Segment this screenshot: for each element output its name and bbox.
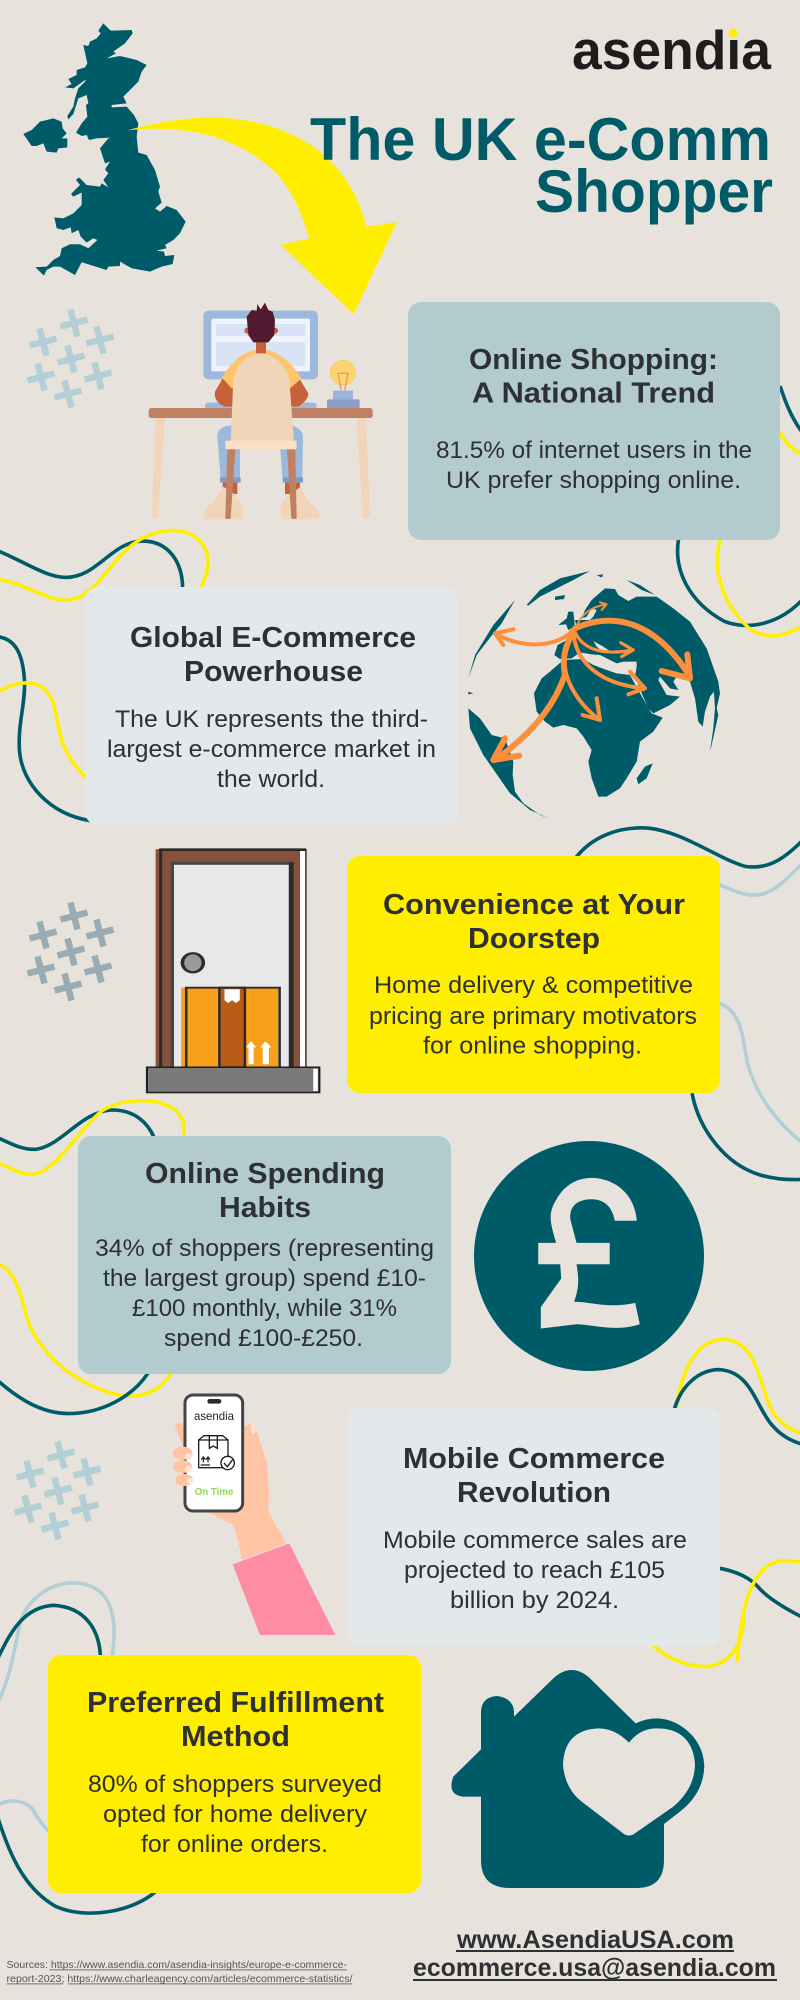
- panel: fulfillment: [48, 1655, 421, 1893]
- icon: house with heart: [451, 1670, 704, 1888]
- panel: global e-commerce: The UK represents the third-: [115, 706, 428, 733]
- decorative plus cluster three: [14, 1442, 100, 1540]
- title: The UK e-Comm: [310, 106, 771, 173]
- panel: convenience: pricing are primary motivators: [369, 1003, 697, 1030]
- panel: convenience: [347, 856, 720, 1093]
- panel: fulfillment: opted for home delivery: [103, 1801, 368, 1828]
- panel: fulfillment: Preferred Fulfillment: [87, 1687, 384, 1719]
- footer contact links: [413, 1926, 777, 1982]
- title: [310, 106, 773, 225]
- footer contact links: ecommerce.usa@asendia.com: [413, 1954, 776, 1982]
- decorative squiggles right of panel one: [781, 387, 800, 455]
- panel: spending habits: spend £100-£250.: [164, 1325, 363, 1352]
- panel: online shopping: 81.5% of internet users in the: [436, 437, 752, 464]
- panel: mobile commerce: Revolution: [457, 1477, 611, 1509]
- decorative squiggles upper: [0, 531, 800, 1144]
- panel: fulfillment: 80% of shoppers surveyed: [88, 1771, 382, 1798]
- panel: spending habits: Online Spending: [145, 1158, 385, 1190]
- panel: mobile commerce: billion by 2024.: [450, 1587, 619, 1614]
- sources: Sources: https://www.asendia.com/asendia-insights/europe-e-commerce-: [6, 1959, 347, 1971]
- panel: spending habits: £100 monthly, while 31%: [132, 1295, 397, 1322]
- panel: online shopping: UK prefer shopping online.: [446, 467, 741, 494]
- panel: online shopping: A National Trend: [472, 378, 715, 410]
- panel: spending habits: [78, 1136, 451, 1374]
- panel: fulfillment: for online orders.: [141, 1831, 328, 1858]
- decorative plus cluster two: [28, 902, 114, 1000]
- icon: UK map: [23, 23, 186, 276]
- panel: mobile commerce: Mobile commerce sales are: [383, 1527, 687, 1554]
- panel: convenience: Doorstep: [468, 923, 600, 955]
- panel: global e-commerce: Global E-Commerce: [130, 622, 416, 654]
- panel: online shopping: [408, 302, 780, 540]
- panel: global e-commerce: [85, 587, 458, 825]
- panel: global e-commerce: the world.: [217, 766, 325, 793]
- panel: spending habits: Habits: [219, 1192, 311, 1224]
- illustration: hand holding phone: [173, 1395, 335, 1635]
- panel: mobile commerce: Mobile Commerce: [403, 1443, 665, 1475]
- panel: convenience: for online shopping.: [423, 1032, 642, 1060]
- decorative squiggles lower: [0, 1618, 744, 1913]
- title: Shopper: [535, 158, 773, 225]
- panel: convenience: Convenience at Your: [383, 889, 685, 921]
- panel: spending habits: 34% of shoppers (representing: [95, 1235, 434, 1262]
- icon: pound coin: [474, 1141, 704, 1371]
- icon: globe with arrows: [468, 571, 720, 818]
- panel: spending habits: the largest group) spend £10-: [103, 1265, 426, 1292]
- panel: fulfillment: Method: [181, 1721, 290, 1753]
- sources: [6, 1959, 353, 1985]
- illustration: door with parcel: [147, 848, 319, 1093]
- panel: convenience: Home delivery & competitive: [374, 972, 693, 999]
- arrow: yellow curved arrow from map to shopper: [128, 118, 397, 314]
- panel: online shopping: Online Shopping:: [469, 344, 718, 376]
- footer contact links: www.AsendiaUSA.com: [456, 1926, 734, 1954]
- logo: asendia: asendia: [572, 19, 771, 81]
- illustration: shopper at desk: [149, 303, 373, 519]
- panel: mobile commerce: [347, 1408, 720, 1646]
- decorative plus cluster one: [28, 310, 114, 408]
- decorative squiggles middle: [0, 1095, 800, 1703]
- sources: report-2023; https://www.charleagency.com/articles/ecommerce-statistics/: [6, 1973, 353, 1985]
- phone label: on time: On Time: [195, 1486, 234, 1498]
- panel: mobile commerce: projected to reach £105: [404, 1557, 665, 1584]
- phone label: asendia: asendia: [194, 1409, 234, 1423]
- panel: global e-commerce: largest e-commerce market in: [107, 736, 436, 763]
- panel: global e-commerce: Powerhouse: [184, 656, 363, 688]
